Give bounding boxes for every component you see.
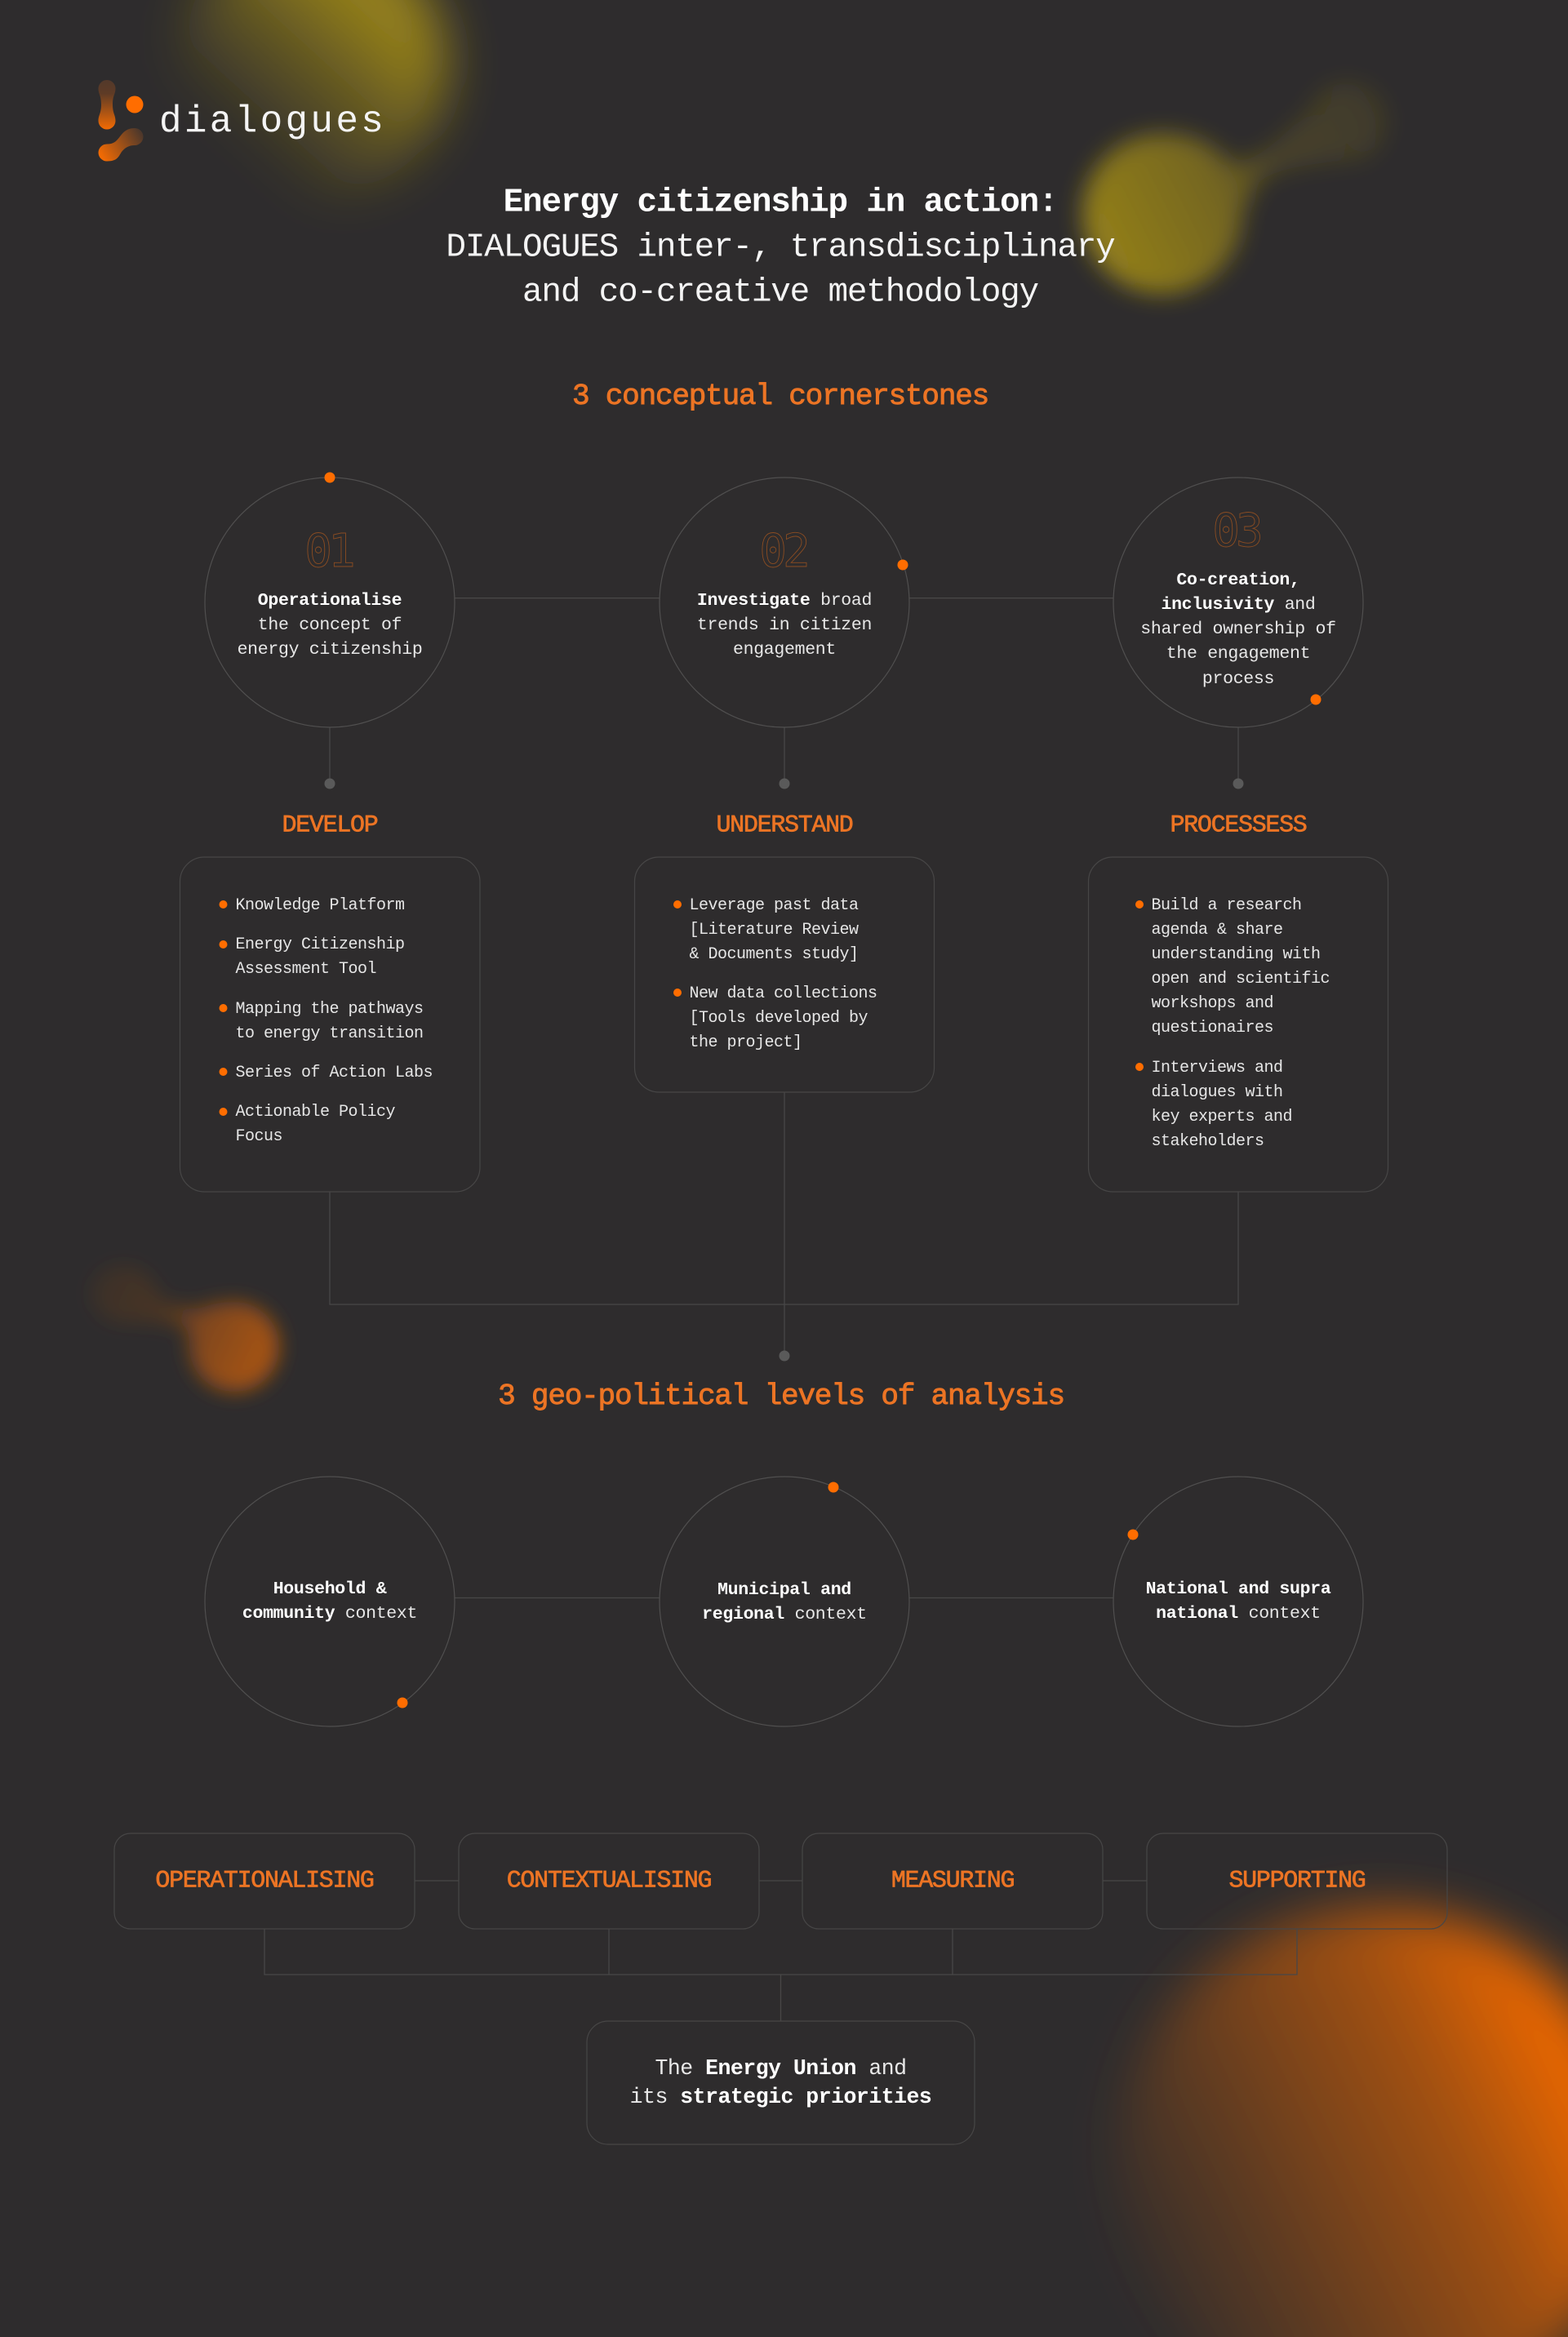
cornerstone 01 text (238, 591, 422, 660)
logo wordmark: dialogues (159, 100, 386, 143)
heading: PROCESSESS: PROCESSESS (1170, 811, 1307, 839)
cornerstone 02 text: engagement (733, 640, 836, 660)
box: energy union (587, 2021, 975, 2144)
panel: understand list (635, 857, 934, 1092)
panel: understand list: [Tools developed by (689, 1009, 868, 1028)
icon: logo mark (98, 80, 144, 162)
panel: national level: national context (1156, 1604, 1321, 1624)
panel: understand list: the project] (689, 1033, 802, 1052)
panel: develop list: Focus (235, 1127, 282, 1146)
box: supporting: SUPPORTING (1228, 1868, 1366, 1895)
box: contextualising (459, 1833, 759, 1929)
panel: develop list: Actionable Policy (235, 1103, 396, 1122)
box: energy union: The Energy Union and (655, 2056, 907, 2081)
panel: processes list: dialogues with (1151, 1083, 1283, 1102)
cornerstone 03 text: the engagement (1166, 644, 1310, 664)
cornerstone 02 text: trends in citizen (697, 615, 872, 635)
title: and co-creative methodology (522, 274, 1039, 312)
panel: develop list: Mapping the pathways (235, 1000, 424, 1019)
panel: develop list: Energy Citizenship (235, 935, 405, 954)
panel: processes list: Build a research (1151, 896, 1302, 915)
panel: cornerstone 01 (205, 472, 455, 727)
number 01: 01 (304, 525, 353, 578)
box: energy union: its strategic priorities (630, 2085, 931, 2109)
cornerstone 01 text: Operationalise (258, 591, 402, 611)
panel: develop list: Series of Action Labs (235, 1064, 433, 1082)
connector nodes (325, 779, 1244, 1362)
panel: household level (205, 1477, 455, 1726)
connectors: geo levels (455, 1597, 1113, 1598)
panel: processes list: workshops and (1151, 994, 1273, 1013)
box: operationalising: OPERATIONALISING (155, 1868, 374, 1895)
panel: develop list: Assessment Tool (235, 960, 376, 979)
panel: national level (1113, 1477, 1363, 1726)
box: measuring: MEASURING (891, 1868, 1014, 1895)
panel: understand list: [Literature Review (689, 921, 859, 940)
heading: UNDERSTAND: UNDERSTAND (716, 811, 853, 839)
blob: top-left yellow glow (178, 0, 447, 200)
panel: understand list: Leverage past data (689, 896, 859, 915)
panel: develop list (180, 857, 480, 1192)
cornerstone 02 text (697, 591, 872, 660)
connectors: cornerstones and boxes (330, 598, 1238, 1356)
panel: processes list: stakeholders (1151, 1132, 1264, 1151)
panel: understand list: New data collections (689, 984, 877, 1003)
cornerstone 03 text: inclusivity and (1161, 595, 1316, 615)
cornerstone 02 text: Investigate broad (697, 591, 872, 611)
panel: municipal level: Municipal and (717, 1580, 851, 1600)
panel: develop list: to energy transition (235, 1024, 424, 1043)
title: DIALOGUES inter-, transdisciplinary (446, 229, 1115, 266)
heading: 3 geo-political levels of analysis: 3 geo-political levels of analysis (498, 1380, 1064, 1413)
heading: DEVELOP: DEVELOP (282, 811, 378, 839)
panel: processes list: understanding with (1151, 945, 1321, 964)
cornerstone 03 text: process (1202, 669, 1274, 689)
panel: cornerstone 03 (1113, 478, 1363, 727)
cornerstone 03 text: Co-creation, (1176, 571, 1300, 590)
panel: cornerstone 02 (660, 478, 909, 727)
box: contextualising: CONTEXTUALISING (507, 1868, 712, 1895)
panel: processes list: open and scientific (1151, 970, 1330, 989)
blob: large bottom-right orange glow (1116, 1908, 1568, 2337)
panel: understand list: & Documents study] (689, 945, 859, 964)
blob: top-right yellow dumbbell (1082, 82, 1387, 294)
blob: left orange dumbbell (91, 1265, 279, 1392)
cornerstone 01 text: the concept of (258, 615, 402, 635)
title (446, 184, 1115, 312)
panel: processes list: agenda & share (1151, 921, 1283, 940)
box: operationalising (114, 1833, 415, 1929)
panel: processes list: questionaires (1151, 1019, 1273, 1037)
connectors: bottom flow (264, 1881, 1297, 2021)
panel: municipal level (660, 1477, 909, 1726)
cornerstone 01 text: energy citizenship (238, 640, 422, 660)
panel: processes list: Interviews and (1151, 1059, 1283, 1077)
box: supporting (1147, 1833, 1447, 1929)
panel: household level: community context (242, 1604, 417, 1624)
number 03: 03 (1212, 504, 1260, 558)
cornerstone 03 text (1140, 571, 1336, 689)
heading: 3 conceptual cornerstones: 3 conceptual cornerstones (572, 380, 988, 413)
cornerstone 03 text: shared ownership of (1140, 620, 1336, 639)
title: Energy citizenship in action: (504, 184, 1057, 222)
box: measuring (802, 1833, 1103, 1929)
panel: processes list (1089, 857, 1388, 1192)
number 02: 02 (759, 525, 806, 578)
logo (98, 80, 386, 162)
panel: national level: National and supra (1146, 1579, 1331, 1599)
panel: municipal level: regional context (702, 1605, 867, 1624)
panel: processes list: key experts and (1151, 1108, 1292, 1126)
panel: household level: Household & (273, 1579, 387, 1599)
panel: develop list: Knowledge Platform (235, 896, 405, 915)
